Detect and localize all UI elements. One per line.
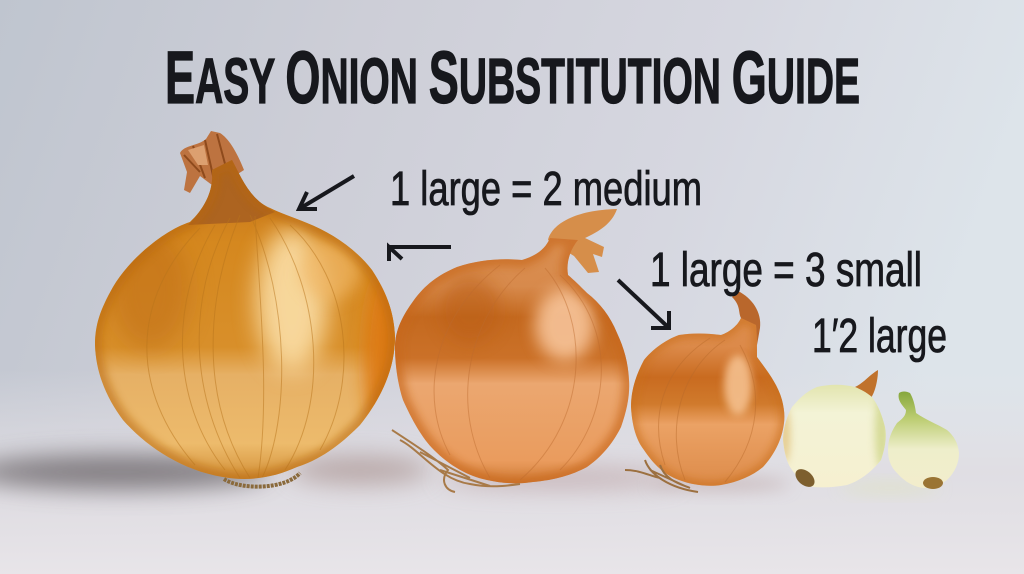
shallot bulb [888,392,959,488]
shallot root [923,477,943,489]
onion: medium [390,209,635,492]
arrow: to large onion top [299,176,354,209]
medium onion top [548,209,617,273]
small onion top [732,291,760,345]
large onion bulb [95,170,395,479]
medium onion bulb [390,230,635,486]
arrow: to small onion [618,280,669,328]
label: 1 large = 3 small: 1 large = 3 small [650,244,922,297]
white onion top [855,370,878,398]
label: 1 large = 2 medium: 1 large = 2 medium [390,163,702,216]
medium onion roots [392,430,520,492]
large onion tuft [180,131,244,193]
white onion bulb [783,384,880,488]
onion: small [625,285,790,492]
white onion root [792,466,818,490]
small onion roots [625,460,698,492]
arrow: left toward large onion [389,247,451,261]
onion: green shallot [888,392,959,489]
title: EASY ONION SUBSTITUTION GUIDE [165,36,860,119]
large onion roots [224,473,300,487]
small onion bulb [631,318,784,486]
label: 1/2 large: 1′2 large [812,310,947,363]
onion: white [780,370,890,490]
onion: large [90,131,408,487]
